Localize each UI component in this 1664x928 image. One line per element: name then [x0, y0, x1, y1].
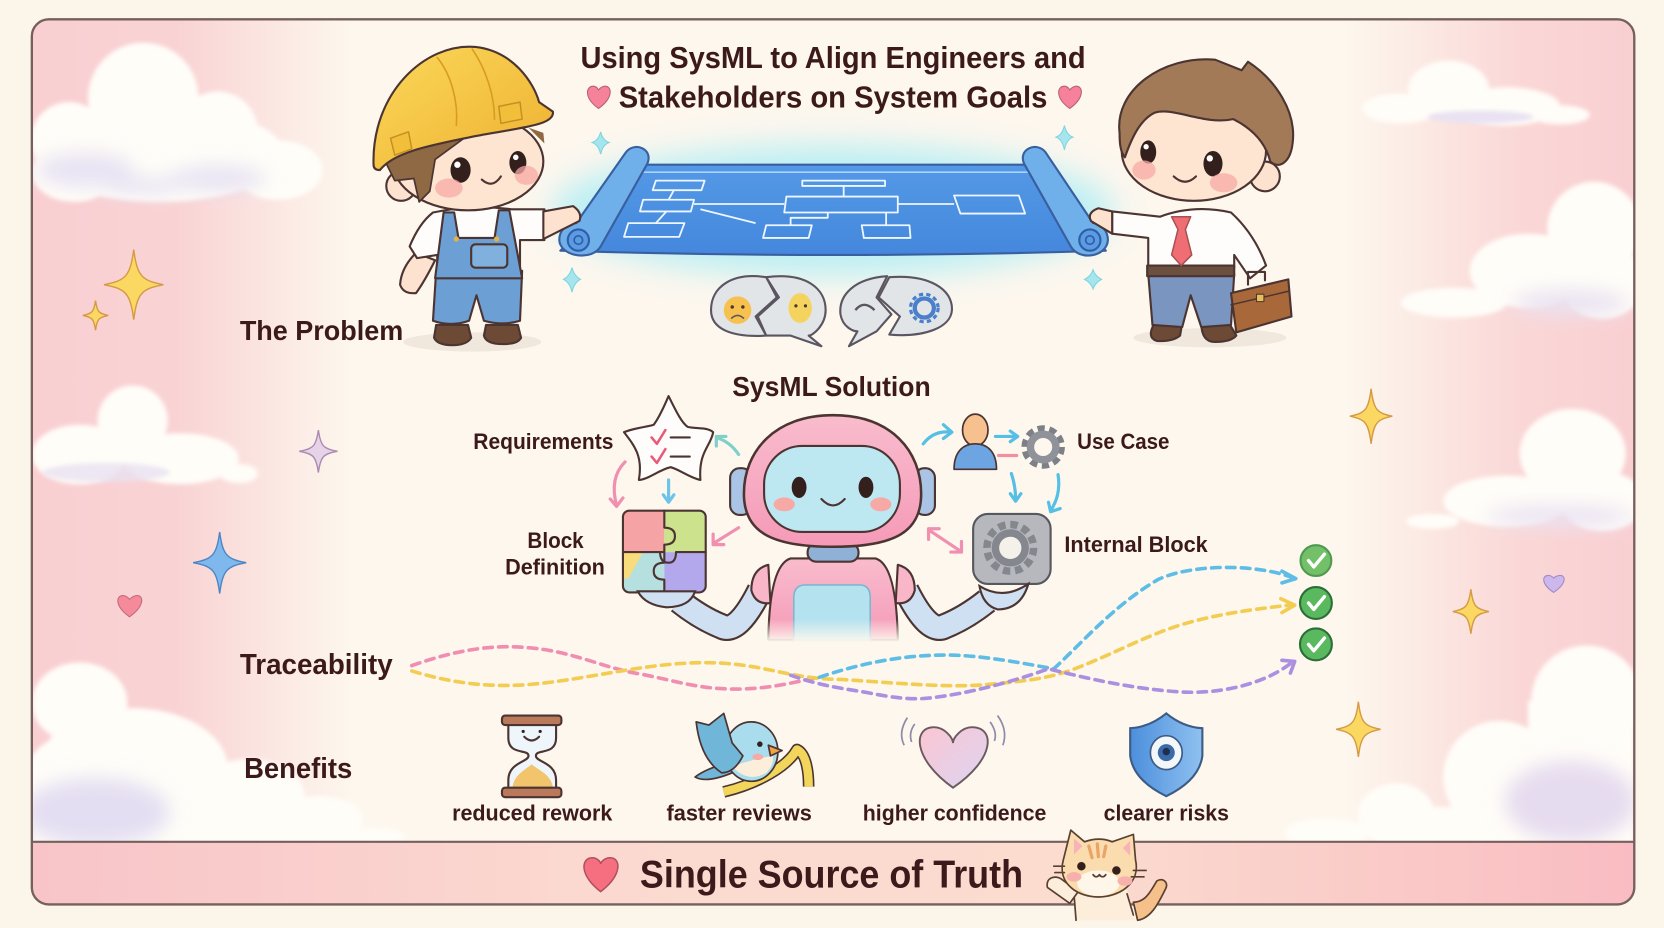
stakeholder hand: [1090, 208, 1112, 234]
footer label: [584, 852, 1023, 896]
decorative sparkle: small gold: [83, 301, 108, 330]
bubble half: question face: [758, 276, 826, 346]
pink path: [412, 647, 819, 689]
icon: internal block gear: [973, 514, 1051, 609]
stakeholder trousers: [1148, 274, 1234, 327]
bubble half: gear: [879, 277, 952, 335]
label: Internal Block: Internal Block: [1064, 532, 1208, 557]
label: Block Definition: Block: [527, 528, 584, 553]
icon: heart with vibration lines: [902, 716, 1005, 788]
decorative sparkle: large gold: [104, 250, 163, 320]
engineer shoes: [434, 325, 471, 345]
robot: [679, 415, 987, 642]
diagram boxes: [624, 181, 1025, 238]
label: The Problem: The Problem: [240, 315, 403, 346]
benefit: higher confidence: [863, 716, 1046, 826]
bubble half: sad face: [711, 276, 777, 336]
engineer legs: [433, 271, 522, 324]
engineer character: [373, 47, 580, 352]
cloud: top left: [31, 43, 323, 202]
stakeholder character: [1090, 59, 1293, 347]
cat face: [1067, 862, 1132, 896]
footer text: Single Source of Truth: [640, 852, 1023, 896]
label: Benefits: Benefits: [244, 753, 352, 785]
engineer overalls: [435, 210, 522, 278]
icon: block definition puzzle: [623, 511, 706, 592]
robot connection arrows: [610, 425, 1060, 552]
cat mascot: [1047, 830, 1167, 920]
cat tail: [1133, 880, 1167, 920]
icon: title heart right: [1059, 86, 1081, 108]
stakeholder hair: [1119, 59, 1293, 165]
benefit: reduced rework: [452, 716, 613, 826]
stakeholder sleeve and shirt: [1112, 209, 1266, 278]
caption: faster reviews: faster reviews: [666, 801, 812, 826]
caption: reduced rework: reduced rework: [452, 801, 613, 826]
label: Requirements: Requirements: [473, 429, 613, 454]
icon: use case person: [954, 414, 996, 469]
arrowheads: [1281, 571, 1296, 673]
engineer head: [393, 113, 543, 210]
title: Stakeholders on System Goals: [619, 79, 1047, 114]
engineer face: [435, 151, 538, 198]
blueprint scroll: [552, 125, 1114, 292]
decorative sparkle: gold right upper: [1350, 389, 1392, 444]
robot hand right: [980, 584, 1028, 609]
stakeholder face: [1132, 140, 1237, 192]
right roll: [1023, 147, 1108, 256]
heading: SysML Solution: SysML Solution: [732, 371, 931, 402]
left roll: [559, 147, 649, 256]
sparkles around blueprint: [564, 125, 1102, 292]
yellow path: [412, 605, 1289, 686]
label: Block Definition: [505, 528, 605, 579]
icon: shield with eye: [1130, 713, 1202, 796]
label: Use Case: Use Case: [1077, 429, 1169, 454]
blue path: [819, 567, 1293, 677]
robot visor: [764, 446, 900, 532]
engineer hard hat: [373, 47, 553, 170]
cat head: [1062, 830, 1136, 897]
icon: bird with tape measure: [695, 713, 809, 792]
robot ears: [730, 468, 751, 515]
decorative sparkle: gold right lower: [1336, 702, 1381, 757]
footer band: [32, 842, 1634, 904]
blueprint sheet: [560, 165, 1106, 255]
robot face: [774, 477, 891, 511]
caption: higher confidence: higher confidence: [863, 801, 1046, 826]
bubble half: broken line: [840, 276, 891, 346]
caption: clearer risks: clearer risks: [1104, 801, 1229, 826]
robot arms: [679, 590, 987, 628]
icon: title heart left: [587, 86, 610, 108]
cloud: right middle: [1406, 409, 1645, 531]
cat paw: [1047, 877, 1078, 903]
cloud: middle left: [32, 385, 258, 484]
icon: hourglass: [502, 716, 561, 797]
decorative sparkle: blue: [193, 532, 246, 593]
benefit: faster reviews: [666, 713, 812, 826]
benefit: clearer risks: [1104, 713, 1229, 826]
robot head: [744, 415, 921, 547]
engineer shirt and right arm: [410, 207, 544, 271]
icon: footer heart: [584, 858, 618, 892]
engineer hand: [543, 206, 580, 239]
robot belly screen: [794, 585, 870, 640]
traceability paths: [412, 567, 1293, 699]
stakeholder head: [1122, 101, 1266, 201]
green check marks: [1300, 545, 1332, 660]
cloud: bottom left: [21, 662, 405, 846]
decorative heart: lilac right: [1544, 575, 1564, 592]
cloud: top right: [1363, 61, 1590, 125]
decorative sparkle: lilac: [299, 430, 337, 472]
stakeholder tie: [1172, 217, 1192, 266]
engineer hair: [384, 136, 467, 202]
robot hand left: [638, 591, 695, 607]
decorative heart: pink left: [118, 596, 142, 617]
cloud: bottom right: [1284, 645, 1642, 848]
broken speech bubbles: [711, 276, 952, 346]
stakeholder shoes: [1151, 323, 1182, 341]
label: Traceability: Traceability: [240, 649, 393, 681]
blueprint glow: [552, 145, 1114, 276]
title: [580, 40, 1086, 114]
title: Using SysML to Align Engineers and: [580, 40, 1086, 75]
cat body: [1074, 890, 1136, 920]
cloud: right upper: [1401, 182, 1645, 319]
stakeholder belt: [1147, 266, 1234, 276]
purple path: [791, 664, 1290, 699]
robot neck: [808, 544, 859, 562]
engineer left arm: [400, 253, 435, 293]
decorative sparkle: gold right middle: [1453, 589, 1489, 634]
label: Block Definition: Definition: [505, 554, 605, 579]
engineer ear: [386, 171, 416, 201]
icon: use case gear: [1025, 429, 1061, 465]
robot body: [768, 558, 898, 640]
briefcase: [1231, 272, 1292, 332]
icon: requirements star: [624, 396, 713, 480]
stakeholder ear: [1250, 162, 1280, 191]
